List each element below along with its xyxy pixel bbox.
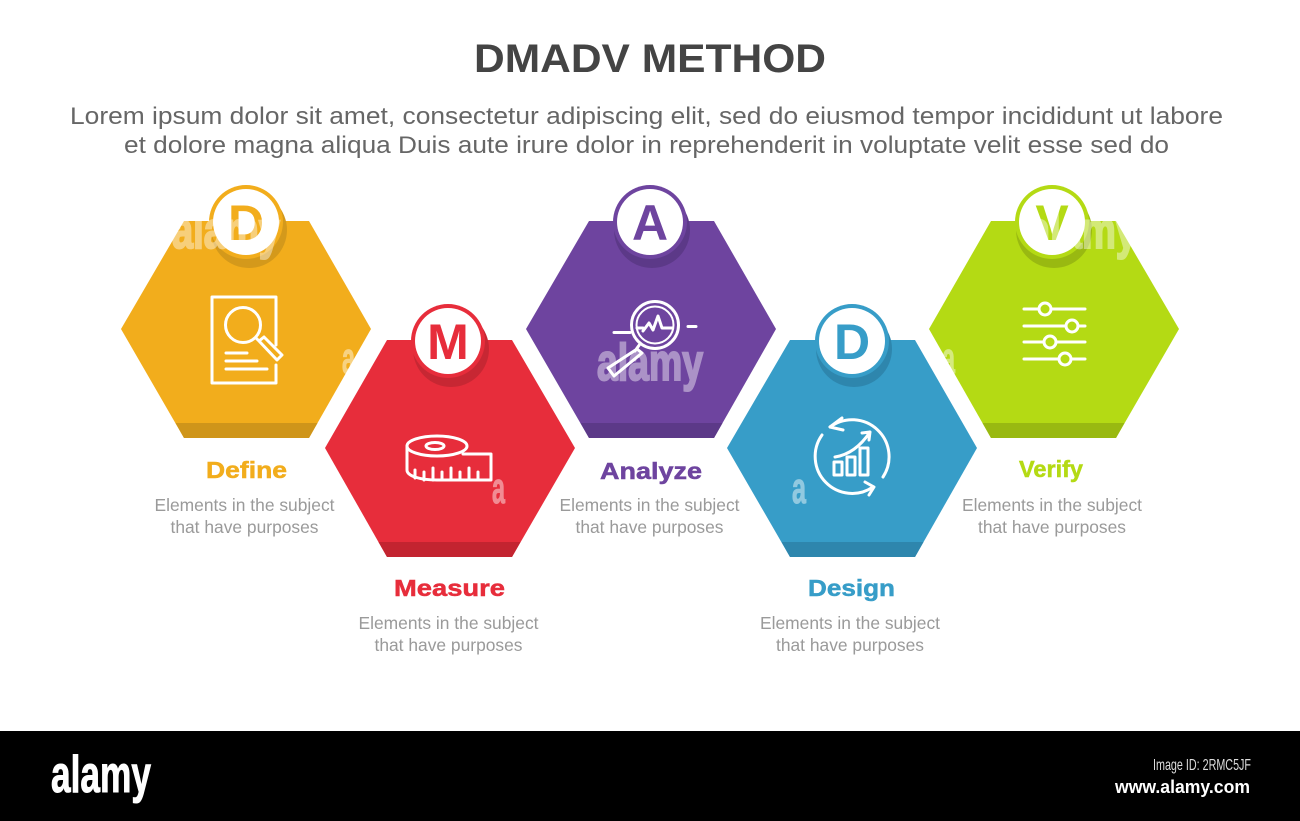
text block: verify: that have purposes — [978, 517, 1126, 537]
badge: V: V — [1035, 195, 1069, 251]
text block: define: Elements in the subject — [154, 495, 335, 515]
text block: design: Design — [808, 575, 895, 601]
text block: design: that have purposes — [776, 635, 924, 655]
text block: design: Elements in the subject — [760, 613, 940, 633]
panel: measure hexagon: a — [492, 464, 505, 513]
panel: design hexagon — [727, 304, 977, 557]
text block: define: that have purposes — [170, 517, 319, 537]
badge: D — [209, 185, 287, 268]
intro text: et dolore magna aliqua Duis aute irure dolor in reprehenderit in voluptate velit esse sed do — [124, 132, 1169, 159]
text block: analyze: Elements in the subject — [560, 495, 740, 515]
badge: M — [411, 304, 489, 387]
text block: define: Define — [206, 457, 287, 483]
intro text: Lorem ipsum dolor sit amet, consectetur adipiscing elit, sed do eiusmod tempor incididunt ut labore — [70, 103, 1223, 130]
panel: define hexagon — [121, 185, 371, 438]
panel: verify hexagon: alamy — [1029, 202, 1137, 260]
icon: sliders — [1024, 303, 1085, 365]
icon: growth cycle — [815, 418, 889, 495]
panel: define hexagon: a — [342, 334, 355, 383]
badge: A: A — [632, 195, 668, 251]
text block: measure: that have purposes — [374, 635, 523, 655]
panel: verify hexagon: a — [942, 334, 955, 383]
text block: define — [154, 457, 335, 537]
icon: measuring tape — [407, 436, 491, 480]
footer bar — [0, 731, 1300, 821]
title: DMADV METHOD — [474, 37, 826, 81]
panel: verify hexagon — [929, 185, 1179, 438]
intro text — [70, 103, 1223, 159]
badge: A — [613, 185, 690, 268]
icon: document search — [212, 297, 282, 383]
text block: verify — [962, 456, 1142, 537]
panel: analyze hexagon — [526, 185, 776, 438]
footer bar: alamy — [51, 746, 151, 804]
text block: measure — [358, 575, 539, 655]
badge: D — [815, 304, 892, 387]
panel: analyze hexagon: alamy — [597, 334, 703, 392]
panel: measure hexagon — [325, 304, 575, 557]
badge: D: D — [834, 314, 870, 370]
text block: analyze: that have purposes — [576, 517, 724, 537]
text block: measure: Measure — [394, 575, 505, 601]
badge: D: D — [228, 195, 264, 251]
footer bar: www.alamy.com — [1114, 777, 1250, 797]
panel: define hexagon: alamy — [172, 202, 280, 260]
text block: verify: Verify — [1019, 456, 1083, 482]
badge: M: M — [427, 314, 469, 370]
footer bar: Image ID: 2RMC5JF — [1153, 757, 1251, 774]
badge: V — [1015, 185, 1092, 268]
text block: measure: Elements in the subject — [358, 613, 539, 633]
text block: design — [760, 575, 940, 655]
text block: analyze: Analyze — [600, 458, 702, 484]
text block: verify: Elements in the subject — [962, 495, 1142, 515]
panel: design hexagon: a — [792, 464, 806, 513]
icon: magnifier with pulse — [608, 302, 696, 376]
text block: analyze — [560, 458, 740, 537]
